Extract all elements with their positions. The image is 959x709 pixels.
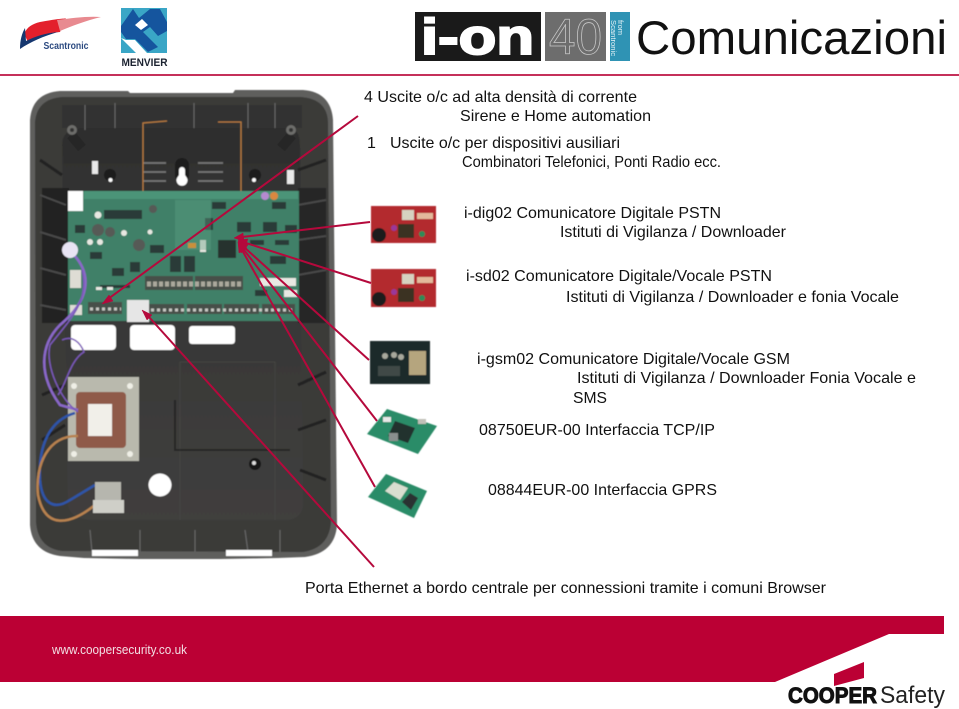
text block: i-dig02: i-dig02 Comunicatore Digitale PSTN	[464, 205, 721, 222]
logo: Scantronic	[20, 17, 101, 52]
posts	[71, 135, 292, 148]
logo: Cooper Safety	[788, 662, 945, 709]
text block: high-current outputs: Combinatori Telefonici, Ponti Radio ecc.	[462, 154, 721, 171]
text block: high-current outputs	[364, 89, 721, 171]
text block: i-dig02	[464, 205, 787, 241]
logo: Menvier: MENVIER	[122, 57, 168, 69]
text block: i-sd02	[466, 268, 899, 306]
arrow: Ethernet	[142, 310, 374, 567]
floor markings	[180, 362, 275, 520]
footer band	[0, 616, 944, 682]
keyhole	[175, 158, 189, 182]
text block: high-current outputs: Uscite o/c per dispositivi ausiliari	[390, 135, 620, 152]
module: 08844EUR-00 GPRS	[368, 474, 427, 518]
text block: i-sd02: i-sd02 Comunicatore Digitale/Vocale PSTN	[466, 268, 772, 285]
transformer	[68, 377, 139, 461]
logo: i-on 40: from	[616, 20, 625, 35]
CPU chip	[218, 240, 236, 258]
text block: i-gsm02: Istituti di Vigilanza / Downloader Fonia Vocale e	[577, 370, 916, 387]
module: i-sd02	[371, 269, 436, 307]
logo: i-on 40	[415, 9, 630, 65]
text block: high-current outputs: 4 Uscite o/c ad alta densità di corrente	[364, 89, 637, 106]
side ribs	[40, 103, 326, 552]
PCB	[68, 191, 299, 321]
logo: Cooper Safety: Safety	[880, 682, 945, 709]
control panel enclosure photo	[30, 90, 337, 559]
text block: i-gsm02: i-gsm02 Comunicatore Digitale/Vocale GSM	[477, 351, 790, 368]
text block: i-gsm02: SMS	[573, 390, 607, 407]
cutouts	[71, 325, 116, 350]
inner floor	[62, 128, 303, 520]
arrow: GPRS	[238, 242, 375, 487]
text block: high-current outputs: 1	[367, 135, 376, 152]
logo: i-on 40: Scantronic	[609, 20, 618, 56]
module: 08750EUR-00 TCP/IP	[367, 409, 437, 454]
logo: Cooper Safety: COOPER	[788, 683, 877, 708]
text block: i-sd02: Istituti di Vigilanza / Downloader e fonia Vocale	[566, 289, 899, 306]
arrow: i-sd02	[238, 239, 371, 283]
footer url: www.coopersecurity.co.uk	[51, 642, 187, 657]
text: GPRS interface: 08844EUR-00 Interfaccia GPRS	[488, 482, 717, 499]
title: Comunicazioni	[636, 12, 947, 65]
enclosure body	[30, 90, 337, 559]
module: i-gsm02	[370, 341, 430, 384]
text block: i-dig02: Istituti di Vigilanza / Downloader	[560, 224, 787, 241]
logo: Menvier	[121, 8, 168, 69]
arrow: TCP/IP	[238, 242, 377, 421]
text: Ethernet port: Porta Ethernet a bordo centrale per connessioni tramite i comuni Browser	[305, 580, 827, 597]
dark recesses beside board	[42, 188, 69, 323]
terminal connector	[95, 482, 121, 500]
copper antenna wires	[143, 121, 241, 193]
arrow: i-dig02	[234, 222, 370, 241]
text: TCP/IP interface: 08750EUR-00 Interfaccia TCP/IP	[479, 422, 715, 439]
bottom tabs	[92, 550, 138, 556]
arrow: i-gsm02	[238, 241, 369, 360]
logo: Scantronic: Scantronic	[44, 41, 89, 52]
header divider	[0, 74, 959, 76]
arrow: uscite o/c	[102, 116, 358, 304]
text block: i-gsm02	[477, 351, 916, 407]
text block: high-current outputs: Sirene e Home automation	[460, 108, 651, 125]
wires	[44, 255, 86, 410]
logo: i-on 40: 40	[549, 9, 602, 65]
terminal blocks	[88, 276, 295, 314]
logo: i-on 40: i-on	[421, 9, 534, 65]
module: i-dig02	[371, 206, 436, 243]
